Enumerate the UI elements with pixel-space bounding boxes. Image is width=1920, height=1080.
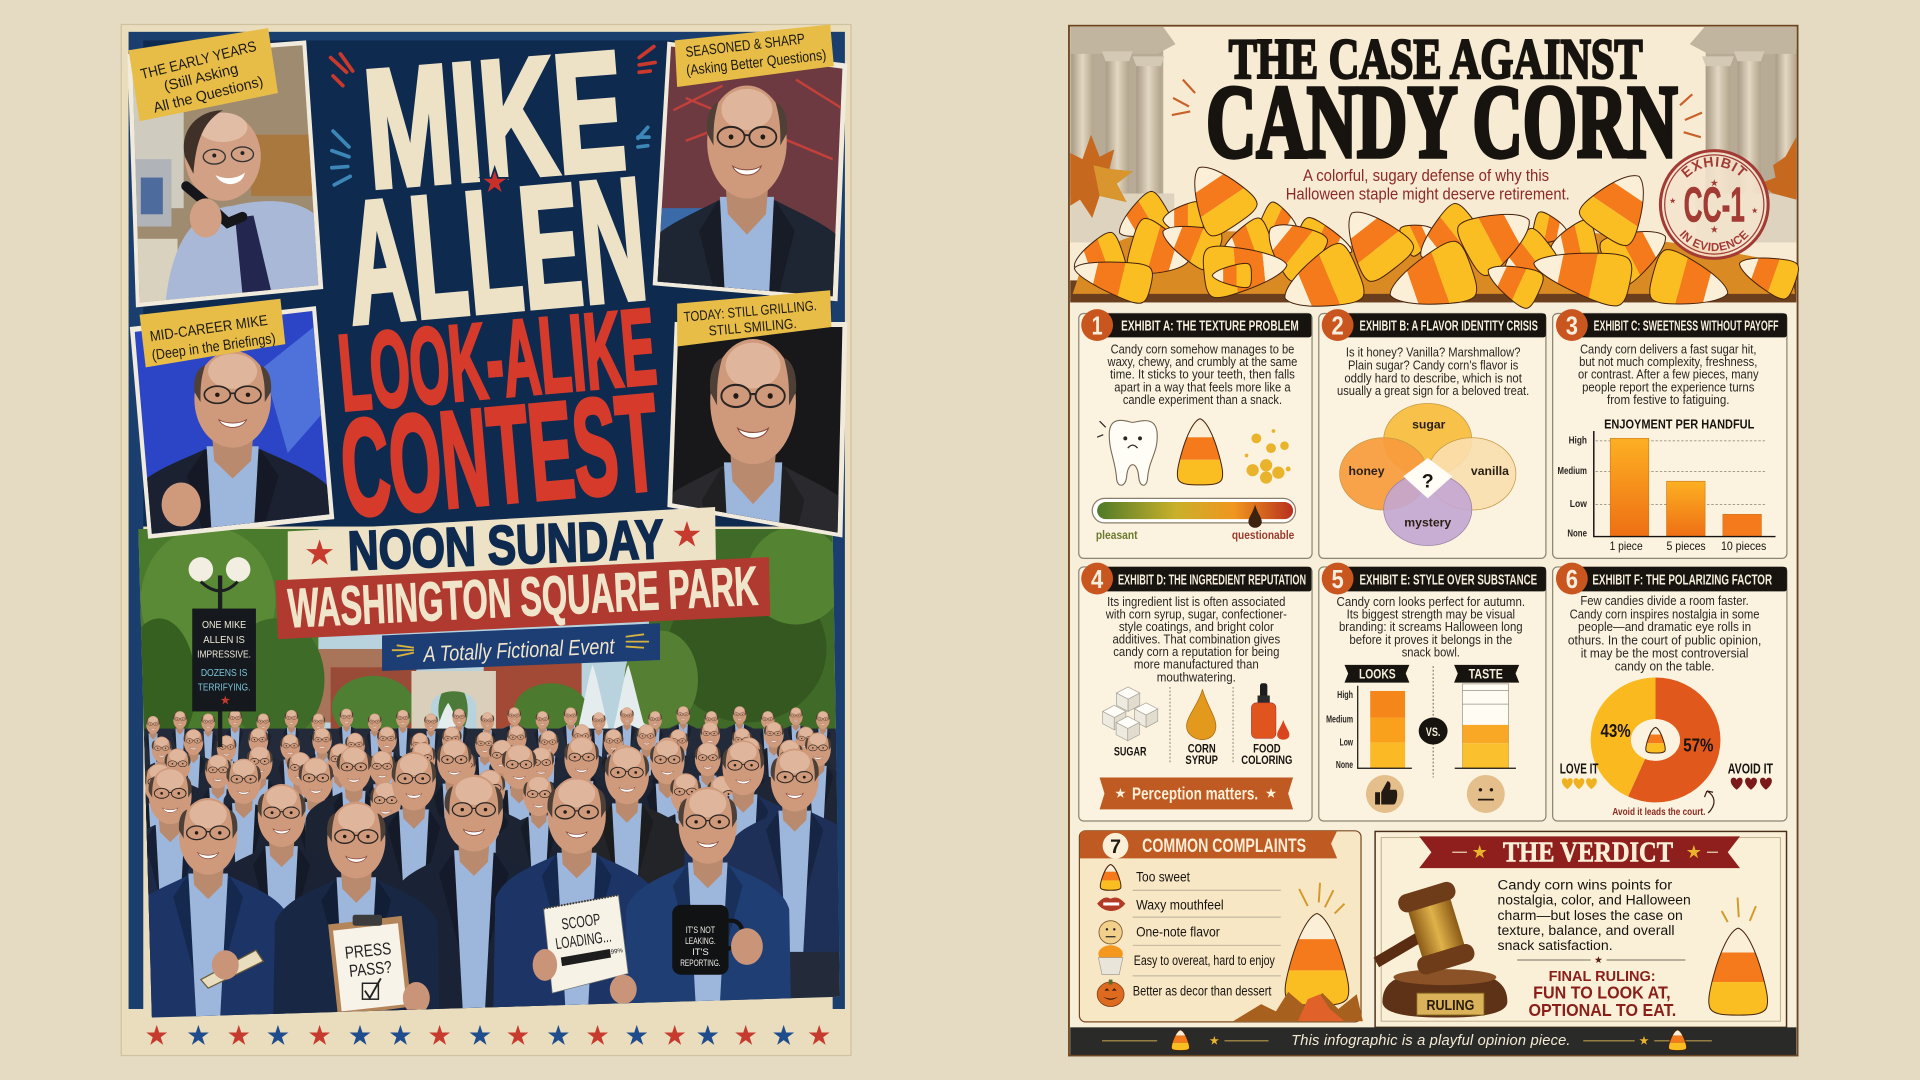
sign: dozens is terrifying: ALLEN IS [203, 635, 245, 646]
gauge: pleasant to questionable: pleasant [1096, 528, 1138, 542]
item: one-note flavor: One-note flavor [1136, 925, 1220, 940]
final ruling [1529, 969, 1676, 1020]
body text: Candy corn looks perfect for autumn. [1337, 594, 1525, 609]
heading exhibit B [1322, 309, 1546, 341]
ingredient labels: SYRUP [1185, 754, 1218, 767]
clipboard: press pass: PRESS [344, 938, 392, 963]
heading exhibit E: EXHIBIT E: STYLE OVER SUBSTANCE [1360, 572, 1537, 589]
verdict text: texture, balance, and overall [1498, 923, 1674, 938]
venn diagram: sugar [1412, 418, 1446, 432]
left columns [1070, 27, 1176, 242]
bar chart: enjoyment per handful [1558, 416, 1776, 553]
body text: before it proves it belongs in the [1349, 632, 1512, 647]
item: waxy mouthfeel: Waxy mouthfeel [1136, 897, 1224, 912]
headline: Mike Allen [339, 16, 653, 360]
callout: avoid it leads the court [1612, 791, 1714, 818]
body text: mouthwatering. [1157, 669, 1236, 684]
venn diagram [1340, 403, 1516, 546]
row of stars [146, 1025, 830, 1045]
heading exhibit D: 4 [1091, 566, 1104, 594]
heading exhibit E: 5 [1332, 566, 1344, 594]
panel: exhibit E style [1319, 563, 1546, 821]
item: better as decor: Better as decor than dessert [1133, 984, 1272, 999]
venn diagram: honey [1349, 464, 1385, 478]
sheet [1069, 26, 1798, 1056]
body text: usually a great sign for a beloved treat. [1337, 383, 1529, 398]
heading exhibit E [1322, 563, 1546, 594]
label: today still grilling [677, 290, 831, 347]
donut chart: love it 43 avoid it 57: 57% [1683, 735, 1713, 756]
banner: perception matters: Perception matters. [1132, 784, 1258, 804]
legend: avoid it [1728, 761, 1773, 790]
crowd of look-alikes [144, 706, 840, 1018]
panel: exhibit B flavor [1319, 309, 1546, 558]
venn diagram: vanilla [1471, 464, 1509, 478]
body text: Few candies divide a room faster. [1580, 593, 1749, 608]
panel: exhibit C sweetness [1553, 309, 1787, 558]
ribbon: the verdict: THE VERDICT [1503, 838, 1673, 869]
maple leaf right [1760, 137, 1796, 200]
venn diagram: ? [1422, 470, 1434, 492]
verdict text [1498, 877, 1691, 953]
heading exhibit B: 2 [1332, 312, 1344, 340]
subtitle: A colorful, sugary defense of why this [1303, 166, 1549, 185]
headline: look-alike contest [334, 285, 664, 546]
gauge: pleasant to questionable [1092, 498, 1296, 542]
icon: gavel [1376, 880, 1507, 1018]
body text [1107, 341, 1297, 407]
bar chart: enjoyment per handful: Low [1570, 498, 1588, 510]
park photo scene [138, 529, 840, 1018]
legend: love it [1560, 761, 1598, 789]
icon: thumbs up [1366, 775, 1404, 813]
label: mid-career mike: (Deep in the Briefings) [151, 331, 277, 364]
mug: it's not leaking: LEAKING. [685, 936, 716, 947]
maple leaf left [1070, 135, 1133, 218]
hands holding props [212, 928, 763, 1014]
icon: food coloring bottle [1251, 683, 1289, 740]
candy corn pile [1064, 145, 1807, 334]
stamp: exhibit CC-1: CC-1 [1684, 179, 1745, 233]
footer bar: This infographic is a playful opinion piece. [1291, 1033, 1571, 1049]
heading common complaints [1080, 831, 1337, 859]
sign: dozens is terrifying: DOZENS IS [201, 668, 248, 679]
item: easy to overeat [1098, 945, 1275, 975]
panel: exhibit F polarizing [1553, 563, 1787, 821]
panel: common complaints [1079, 831, 1363, 1022]
final ruling: FUN TO LOOK AT, [1533, 982, 1671, 1002]
body text: othurs. In the court of public opinion, [1568, 633, 1761, 648]
bar chart: enjoyment per handful: 1 piece [1610, 539, 1643, 553]
bar chart: enjoyment per handful: 5 pieces [1667, 539, 1706, 553]
body text: Is it honey? Vanilla? Marshmallow? [1346, 345, 1520, 360]
big candy corn with rays [1279, 883, 1355, 1012]
mug: it's not leaking: IT'S NOT [686, 925, 715, 936]
looks versus taste chart: TASTE [1469, 666, 1503, 681]
fountains [437, 665, 645, 730]
poster: Mike Allen look-alike contest [108, 16, 876, 1056]
sign: dozens is terrifying [192, 609, 256, 711]
ingredient labels: FOOD [1253, 743, 1281, 756]
candy corn with rays [1703, 898, 1773, 1021]
item: too sweet [1098, 863, 1190, 892]
body text: Its biggest strength may be visual [1347, 607, 1515, 622]
heading exhibit A: EXHIBIT A: THE TEXTURE PROBLEM [1121, 317, 1299, 334]
verdict text: Candy corn wins points for [1498, 877, 1673, 892]
body text: Candy corn delivers a fast sugar hit, [1580, 341, 1756, 356]
icon: sugar cubes [1103, 687, 1158, 741]
heading exhibit F: 6 [1566, 566, 1578, 594]
label: the early years: All the Questions) [152, 74, 265, 117]
looks versus taste chart: Low [1340, 737, 1354, 749]
ingredient labels [1114, 687, 1292, 767]
verdict text: charm—but loses the case on [1498, 908, 1683, 923]
body text: people—and dramatic eye rolls in [1578, 619, 1751, 634]
spark rays around headline [331, 47, 655, 185]
poster navy backdrop [129, 32, 845, 1010]
bar chart: enjoyment per handful: Medium [1558, 465, 1587, 477]
heading exhibit C: 3 [1566, 312, 1578, 340]
heading exhibit A [1081, 309, 1311, 341]
heading common complaints: COMMON COMPLAINTS [1142, 836, 1306, 857]
icon: corn syrup drop [1187, 689, 1216, 740]
looks versus taste chart: High [1337, 689, 1353, 701]
body text: with corn syrup, sugar, confectioner- [1105, 607, 1287, 622]
body text: snack bowl. [1402, 645, 1460, 660]
icon: sad tooth [1097, 420, 1157, 485]
footer bar [1070, 1027, 1796, 1055]
lamp post [189, 557, 250, 747]
mug: it's not leaking: IT'S [692, 947, 709, 958]
banner: washington square park [276, 554, 770, 639]
label: today still grilling: TODAY: STILL GRILLING. [683, 297, 817, 325]
body text: people report the experience turns [1582, 379, 1755, 394]
body text: or contrast. After a few pieces, many [1578, 367, 1759, 382]
heading exhibit A: 1 [1092, 312, 1103, 340]
label: seasoned and sharp: SEASONED & SHARP [685, 31, 806, 61]
heading exhibit F [1556, 563, 1787, 594]
body text: candy corn a reputation for being [1113, 644, 1279, 659]
panel: exhibit D ingredients [1079, 563, 1312, 821]
label: seasoned and sharp [675, 24, 834, 87]
banner: a totally fictional event [382, 623, 660, 671]
heading common complaints: 7 [1110, 836, 1121, 858]
title [1206, 28, 1678, 180]
banner: noon sunday [288, 507, 716, 595]
ribbon: the verdict [1419, 836, 1740, 869]
body text: Candy corn somehow manages to be [1111, 341, 1294, 356]
photo: mid-career mike [130, 306, 334, 539]
item: too sweet: Too sweet [1136, 870, 1190, 885]
body text: candy on the table. [1615, 659, 1714, 674]
body text: Plain sugar? Candy corn's flavor is [1348, 357, 1519, 372]
photo: today [667, 322, 848, 538]
body text: waxy, chewy, and crumbly at the same [1107, 354, 1297, 369]
donut chart: love it 43 avoid it 57 [1591, 678, 1720, 802]
title: THE CASE AGAINST [1229, 28, 1643, 91]
venn diagram: mystery [1404, 516, 1451, 530]
banner: washington square park: WASHINGTON SQUARE PARK [286, 554, 759, 639]
banner: noon sunday: NOON SUNDAY [347, 508, 665, 582]
subtitle: Halloween staple might deserve retirement. [1286, 185, 1570, 204]
sign: dozens is terrifying: TERRIFYING. [198, 683, 250, 694]
body text: Its ingredient list is often associated [1107, 594, 1285, 609]
panel: exhibit A texture [1079, 309, 1312, 558]
bar chart: enjoyment per handful: 10 pieces [1721, 539, 1766, 553]
heading exhibit C [1556, 309, 1787, 341]
poster: Mike Allen look-alike contest: CONTEST [335, 366, 664, 546]
bar chart: enjoyment per handful: High [1569, 434, 1587, 446]
ingredient labels: CORN [1188, 743, 1216, 756]
sign: dozens is terrifying: ONE MIKE [202, 620, 247, 631]
small notepad held by man [201, 950, 263, 988]
body text: style coatings, and bright color [1119, 619, 1274, 634]
heading exhibit F: EXHIBIT F: THE POLARIZING FACTOR [1592, 572, 1772, 589]
body text: candle experiment than a snack. [1123, 392, 1282, 407]
title rays [1172, 80, 1702, 137]
body text [1105, 594, 1287, 684]
header scene [1070, 27, 1796, 302]
divider with star [1517, 956, 1686, 963]
poster: the case against candy corn [1068, 24, 1799, 1056]
clipboard: press pass: PASS? [348, 957, 393, 981]
subtitle [1286, 166, 1570, 204]
banner: a totally fictional event: A Totally Fictional Event [421, 633, 616, 667]
stamp: exhibit CC-1: EXHIBIT [1680, 156, 1748, 178]
body text: additives. That combination gives [1112, 632, 1281, 647]
gauge: pleasant to questionable: questionable [1232, 528, 1294, 542]
verdict text: nostalgia, color, and Halloween [1498, 893, 1691, 908]
panel: the verdict [1375, 831, 1787, 1027]
label: today still grilling: STILL SMILING. [708, 315, 797, 339]
body text: apart in a way that feels more like a [1114, 379, 1291, 394]
item: easy to overeat: Easy to overeat, hard to enjoy [1134, 953, 1275, 968]
body text [1337, 345, 1529, 398]
label: the early years: (Still Asking [162, 61, 240, 95]
verdict text: snack satisfaction. [1498, 938, 1613, 953]
title: CANDY CORN [1206, 64, 1678, 180]
label: the early years: THE EARLY YEARS [139, 39, 258, 83]
banner: perception matters [1100, 778, 1293, 809]
ingredient labels: SUGAR [1114, 746, 1147, 759]
final ruling: OPTIONAL TO EAT. [1529, 1000, 1676, 1020]
icon: crumbs [1245, 429, 1291, 484]
triumphal arch [411, 671, 496, 729]
heading exhibit B: EXHIBIT B: A FLAVOR IDENTITY CRISIS [1360, 317, 1538, 334]
body text: more manufactured than [1134, 657, 1259, 672]
ingredient labels: COLORING [1241, 754, 1292, 767]
body text: from festive to fatiguing. [1607, 392, 1729, 407]
final ruling: FINAL RULING: [1549, 969, 1656, 985]
body text: but not much complexity, freshness, [1579, 354, 1757, 369]
legend: avoid it: AVOID IT [1728, 761, 1773, 777]
photo: seasoned and sharp [652, 42, 848, 302]
body text: branding: it screams Halloween long [1339, 619, 1523, 634]
body text [1578, 341, 1759, 407]
label: mid-career mike [140, 299, 285, 367]
callout: avoid it leads the court: Avoid it leads the court. [1612, 807, 1706, 818]
photo: the early years [122, 37, 331, 312]
body text: oddly hard to describe, which is not [1344, 370, 1522, 385]
donut chart: love it 43 avoid it 57: 43% [1600, 720, 1631, 741]
looks versus taste chart: Medium [1326, 713, 1353, 725]
notebook: scoop loading: 99% [610, 947, 624, 956]
looks versus taste chart: VS. [1426, 725, 1440, 739]
icon: neutral face [1467, 775, 1505, 813]
item: better as decor [1097, 980, 1272, 1007]
item: waxy mouthfeel [1097, 897, 1224, 912]
looks versus taste chart: None [1336, 759, 1353, 771]
label: mid-career mike: MID-CAREER MIKE [149, 313, 269, 345]
heading exhibit D: EXHIBIT D: THE INGREDIENT REPUTATION [1118, 572, 1306, 589]
icon: candy corn [1173, 415, 1227, 490]
autumn leaves [1233, 992, 1363, 1021]
notebook: scoop loading [544, 895, 628, 993]
label: the early years [129, 28, 278, 121]
headline: Mike Allen: ALLEN [339, 142, 653, 360]
label: seasoned and sharp: (Asking Better Questions) [685, 47, 827, 79]
poster: Mike Allen look-alike contest: LOOK-ALIKE [334, 285, 660, 433]
bar chart: enjoyment per handful: None [1567, 527, 1587, 539]
notebook: scoop loading: SCOOP [560, 911, 602, 934]
icon: gavel: RULING [1427, 998, 1474, 1014]
headline: Mike Allen: MIKE [358, 16, 631, 223]
body text: it may be the most controversial [1581, 646, 1749, 661]
legend: love it: LOVE IT [1560, 761, 1598, 777]
sign: dozens is terrifying: IMPRESSIVE. [197, 650, 251, 661]
stamp: exhibit CC-1 [1658, 149, 1770, 260]
notebook: scoop loading: LOADING... [554, 929, 613, 953]
heading exhibit C: EXHIBIT C: SWEETNESS WITHOUT PAYOFF [1594, 317, 1779, 334]
right columns [1690, 27, 1796, 242]
body text [1337, 594, 1525, 660]
body text: time. It sticks to your teeth, then falls [1110, 367, 1295, 382]
bar chart: enjoyment per handful: ENJOYMENT PER HANDFUL [1604, 416, 1754, 431]
clipboard: press pass [328, 915, 411, 1016]
looks versus taste chart: LOOKS [1359, 666, 1396, 681]
body text: Candy corn inspires nostalgia in some [1570, 606, 1759, 621]
headline star [481, 168, 509, 194]
mug: it's not leaking: REPORTING. [680, 958, 721, 969]
mug: it's not leaking [672, 905, 742, 975]
heading exhibit D [1081, 563, 1311, 594]
looks versus taste chart [1326, 665, 1519, 778]
poster paper [121, 24, 851, 1056]
item: one-note flavor [1099, 921, 1220, 944]
body text [1568, 593, 1761, 674]
stamp: exhibit CC-1: IN EVIDENCE [1680, 230, 1749, 252]
